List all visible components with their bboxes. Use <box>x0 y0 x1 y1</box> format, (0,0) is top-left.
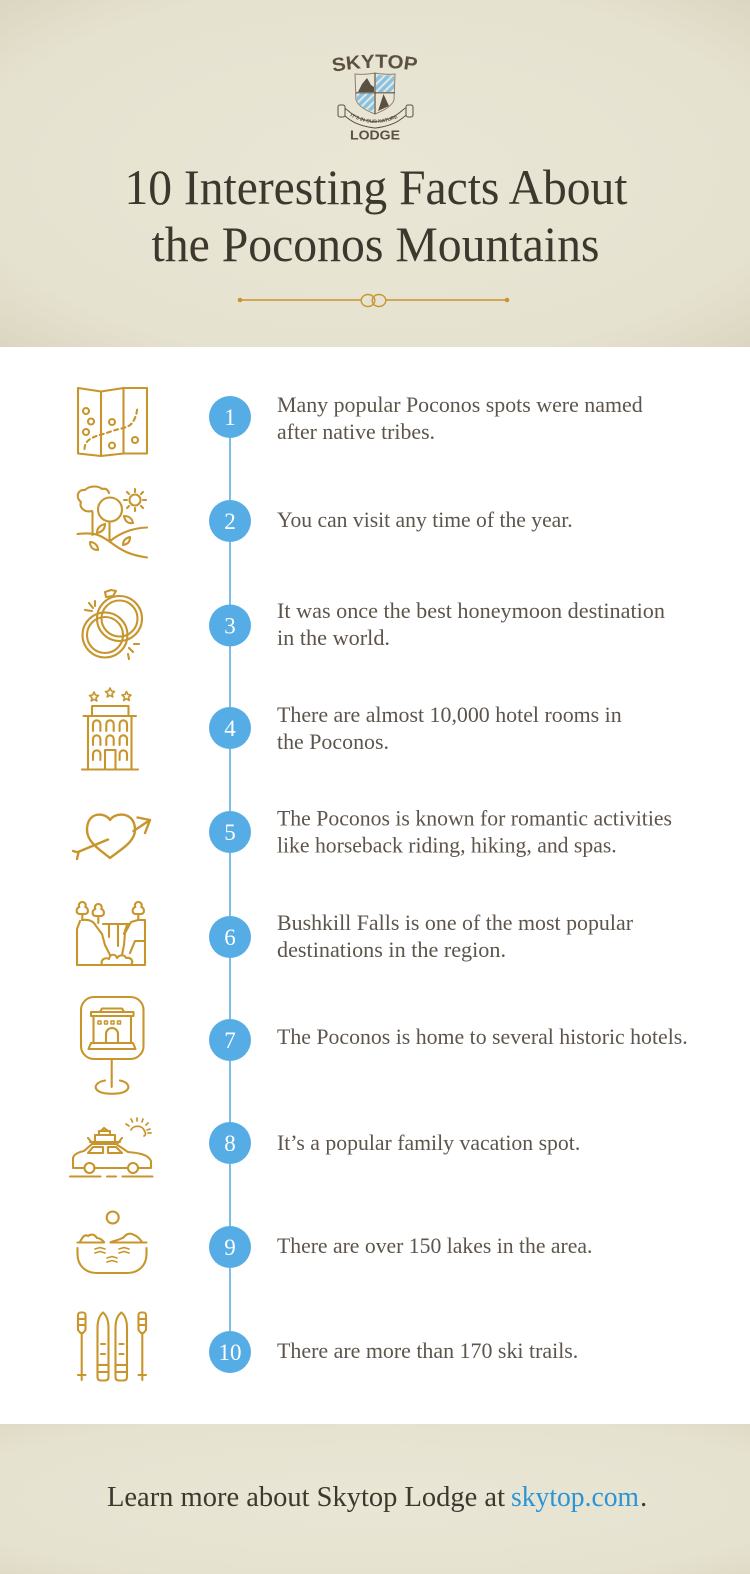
fact 6: destinations in the region. <box>277 938 506 962</box>
fact 1 <box>277 393 643 444</box>
number 2 <box>209 500 251 542</box>
fact 5 <box>277 806 672 858</box>
number 10 <box>209 1331 251 1373</box>
icon: skis and poles <box>78 1312 146 1380</box>
number 3 <box>209 604 251 646</box>
footer call to action: . <box>640 1481 647 1513</box>
item 2 <box>78 486 573 558</box>
panel: header <box>0 0 750 347</box>
title: the Poconos Mountains <box>152 216 600 272</box>
icon: waterfall with trees <box>77 902 145 965</box>
number 8 <box>209 1122 251 1164</box>
logo: Skytop Lodge crest <box>332 54 418 142</box>
icon: heart with arrow <box>73 815 150 859</box>
fact 5: like horseback riding, hiking, and spas. <box>277 834 617 858</box>
fact 6 <box>277 911 634 962</box>
icon: car with luggage and sun <box>70 1118 152 1176</box>
logo: Skytop Lodge crest: LODGE <box>350 128 400 142</box>
fact 3: in the world. <box>277 626 390 650</box>
number 9 <box>209 1226 251 1268</box>
icon: hotel with stars <box>82 688 138 770</box>
icon: lake with mountains <box>78 1212 146 1273</box>
item 8 <box>70 1118 580 1176</box>
number 9: 9 <box>224 1235 236 1260</box>
fact 6: Bushkill Falls is one of the most popular <box>277 911 634 935</box>
item 3 <box>82 590 665 659</box>
ornamental divider <box>238 294 509 306</box>
item 5 <box>73 806 672 859</box>
number 2: 2 <box>224 509 236 534</box>
fact 1: after native tribes. <box>277 420 435 444</box>
number 6 <box>209 916 251 958</box>
fact 3 <box>277 599 665 650</box>
item 6 <box>77 902 634 965</box>
number 4 <box>209 707 251 749</box>
number 10: 10 <box>218 1340 242 1365</box>
number 5 <box>209 811 251 853</box>
logo: Skytop Lodge crest: IT’S IN OUR NATURE <box>350 113 398 123</box>
fact 4: the Poconos. <box>277 730 389 754</box>
fact 2: You can visit any time of the year. <box>277 508 573 532</box>
item 10 <box>78 1312 578 1380</box>
number 7: 7 <box>224 1028 236 1053</box>
number 8: 8 <box>224 1131 236 1156</box>
number 4: 4 <box>224 716 236 741</box>
item 1 <box>78 388 643 456</box>
footer call to action: skytop.com <box>511 1481 639 1513</box>
number 1: 1 <box>224 405 236 430</box>
number 1 <box>209 396 251 438</box>
fact 8: It’s a popular family vacation spot. <box>277 1131 580 1155</box>
fact 7: The Poconos is home to several historic hotels. <box>277 1025 688 1049</box>
icon: historic hotel sign <box>81 997 144 1094</box>
logo: Skytop Lodge crest: SKYTOP <box>332 54 418 72</box>
title <box>124 159 628 272</box>
panel: footer <box>0 1424 750 1574</box>
fact 1: Many popular Poconos spots were named <box>277 393 643 417</box>
icon: wedding rings <box>82 590 142 659</box>
fact 10: There are more than 170 ski trails. <box>277 1339 578 1363</box>
number 7 <box>209 1019 251 1061</box>
icon: folded map <box>78 388 147 456</box>
item 9 <box>78 1212 592 1273</box>
item 7 <box>81 997 688 1094</box>
fact 9: There are over 150 lakes in the area. <box>277 1234 592 1258</box>
fact 3: It was once the best honeymoon destination <box>277 599 665 623</box>
title: 10 Interesting Facts About <box>124 159 628 215</box>
timeline line <box>229 417 231 1352</box>
fact 4 <box>277 703 622 754</box>
fact 5: The Poconos is known for romantic activities <box>277 806 672 830</box>
fact 4: There are almost 10,000 hotel rooms in <box>277 703 622 727</box>
number 6: 6 <box>224 925 236 950</box>
item 4 <box>82 688 622 770</box>
footer call to action: Learn more about Skytop Lodge at <box>107 1481 505 1513</box>
number 5: 5 <box>224 820 236 845</box>
number 3: 3 <box>224 614 236 638</box>
icon: landscape with trees and sun <box>78 486 147 558</box>
